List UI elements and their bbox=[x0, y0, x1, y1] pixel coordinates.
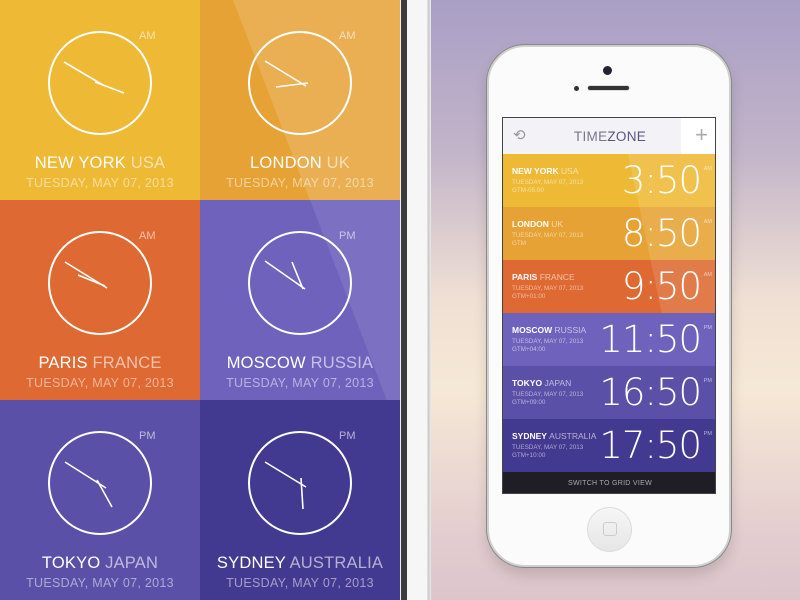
row: New York: TUESDAY, MAY 07, 2013 bbox=[512, 179, 583, 186]
app header: + bbox=[695, 122, 708, 147]
row: Paris: GTM+01:00 bbox=[512, 293, 545, 300]
row: Tokyo: GTM+09:00 bbox=[512, 399, 545, 406]
row: Paris: PARIS FRANCE bbox=[512, 272, 575, 282]
grid tile: Moscow bbox=[200, 200, 400, 400]
row: New York: 3:50 bbox=[622, 159, 701, 202]
grid tile: Paris: TUESDAY, MAY 07, 2013 bbox=[26, 376, 174, 390]
grid tile: Sydney: SYDNEY AUSTRALIA bbox=[217, 554, 383, 572]
grid tile: New York bbox=[0, 0, 200, 200]
grid tile: New York: TUESDAY, MAY 07, 2013 bbox=[26, 176, 174, 190]
row: London: LONDON UK bbox=[512, 219, 563, 229]
row: Moscow: 11:50 bbox=[599, 318, 701, 361]
row: Paris: TUESDAY, MAY 07, 2013 bbox=[512, 285, 583, 292]
row: New York bbox=[503, 154, 717, 207]
grid tile: London bbox=[200, 0, 400, 200]
row: London: GTM bbox=[512, 240, 526, 247]
grid tile: Moscow: PM bbox=[339, 230, 356, 242]
grid tile: New York: AM bbox=[139, 30, 156, 42]
row: Tokyo: TUESDAY, MAY 07, 2013 bbox=[512, 391, 583, 398]
row: Moscow bbox=[503, 313, 717, 366]
row: London bbox=[503, 207, 717, 260]
grid tile: Tokyo bbox=[0, 400, 200, 600]
row: Sydney: SYDNEY AUSTRALIA bbox=[512, 431, 596, 441]
row: Sydney: 17:50 bbox=[599, 424, 701, 467]
grid tile: Tokyo: TUESDAY, MAY 07, 2013 bbox=[26, 576, 174, 590]
icon: home button bbox=[587, 507, 632, 552]
app header bbox=[503, 118, 717, 154]
app header: ⟲ bbox=[513, 127, 526, 144]
row: Tokyo: TOKYO JAPAN bbox=[512, 378, 571, 388]
grid tile: Paris bbox=[0, 200, 200, 400]
grid tile: Moscow: MOSCOW RUSSIA bbox=[227, 354, 373, 372]
phone bbox=[487, 45, 731, 567]
row: Paris: 9:50 bbox=[622, 265, 701, 308]
row: Tokyo bbox=[503, 366, 717, 419]
gloss overlay bbox=[628, 154, 800, 313]
grid tile: Sydney: TUESDAY, MAY 07, 2013 bbox=[226, 576, 374, 590]
row: New York: AM bbox=[704, 166, 712, 172]
side strip bbox=[401, 0, 431, 600]
grid tile: New York: NEW YORK USA bbox=[35, 154, 165, 172]
row: New York: NEW YORK USA bbox=[512, 166, 578, 176]
row: London: AM bbox=[704, 219, 712, 225]
row: Sydney bbox=[503, 419, 717, 472]
grid tile: Sydney bbox=[200, 400, 400, 600]
row: Tokyo: 16:50 bbox=[599, 371, 701, 414]
row: Moscow: GTM+04:00 bbox=[512, 346, 545, 353]
app header: TIMEZONE bbox=[574, 129, 646, 144]
grid tile: London: LONDON UK bbox=[250, 154, 350, 172]
row: Sydney: TUESDAY, MAY 07, 2013 bbox=[512, 444, 583, 451]
grid tile: Paris: AM bbox=[139, 230, 156, 242]
row: Paris: AM bbox=[704, 272, 712, 278]
grid tile: London: AM bbox=[339, 30, 356, 42]
footer button bbox=[503, 472, 717, 495]
row: Sydney: GTM+10:00 bbox=[512, 452, 545, 459]
icon: speaker bbox=[587, 85, 630, 91]
grid tile: Sydney: PM bbox=[339, 430, 356, 442]
phone screen bbox=[502, 117, 716, 494]
grid tile: Tokyo: TOKYO JAPAN bbox=[42, 554, 158, 572]
row: Moscow: TUESDAY, MAY 07, 2013 bbox=[512, 338, 583, 345]
icon: camera bbox=[603, 66, 612, 75]
grid tile: Paris: PARIS FRANCE bbox=[38, 354, 162, 372]
row: New York: GTM-05:00 bbox=[512, 187, 544, 194]
grid tile: London: TUESDAY, MAY 07, 2013 bbox=[226, 176, 374, 190]
row: Moscow: MOSCOW RUSSIA bbox=[512, 325, 586, 335]
row: Moscow: PM bbox=[704, 325, 712, 331]
grid tile: Tokyo: PM bbox=[139, 430, 156, 442]
right background bbox=[431, 0, 800, 600]
row: Tokyo: PM bbox=[704, 378, 712, 384]
footer button: SWITCH TO GRID VIEW bbox=[568, 480, 652, 487]
row: Paris bbox=[503, 260, 717, 313]
row: London: TUESDAY, MAY 07, 2013 bbox=[512, 232, 583, 239]
row: London: 8:50 bbox=[622, 212, 701, 255]
row: Sydney: PM bbox=[704, 431, 712, 437]
grid tile: Moscow: TUESDAY, MAY 07, 2013 bbox=[226, 376, 374, 390]
